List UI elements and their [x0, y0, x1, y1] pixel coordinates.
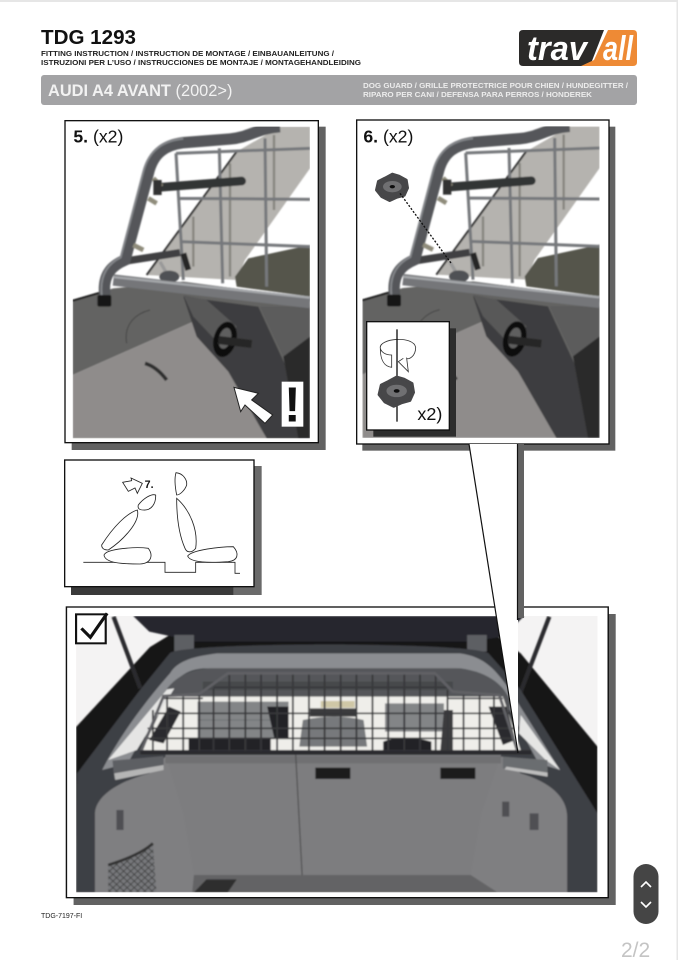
title: TDG 1293 — [41, 26, 136, 49]
fitting instruction text: ISTRUZIONI PER L’USO / INSTRUCCIONES DE MONTAJE / MONTAGEHANDLEIDING — [41, 58, 361, 67]
step 6 label: 6. (x2) — [363, 126, 413, 146]
product description: DOG GUARD / GRILLE PROTECTRICE POUR CHIEN / HUNDEGITTER / — [363, 81, 628, 90]
panel: final installed view — [66, 607, 616, 905]
inset: knob rotation — [367, 322, 456, 437]
logo: travall: trav — [527, 30, 589, 68]
arrow — [234, 387, 273, 423]
step 5 label: 5. (x2) — [73, 126, 123, 146]
scroll control — [634, 864, 658, 924]
product description: RIPARO PER CANI / DEFENSA PARA PERROS / HONDEREK — [363, 90, 593, 99]
callout connector wedge — [469, 444, 524, 753]
product description — [363, 81, 628, 99]
checkbox — [76, 613, 107, 643]
logo: travall — [519, 30, 637, 68]
step 7 label: 7. — [145, 479, 154, 491]
fitting instruction text — [41, 49, 361, 67]
header bar — [41, 75, 637, 105]
panel: step 7 seats — [65, 460, 262, 595]
footer code: TDG-7197-FI — [41, 913, 82, 920]
warning mark: ! — [284, 378, 301, 433]
inset multiplier: x2) — [417, 404, 442, 424]
fitting instruction text: FITTING INSTRUCTION / INSTRUCTION DE MONTAGE / EINBAUANLEITUNG / — [41, 49, 334, 58]
panel: step 5 — [65, 121, 326, 450]
panel: step 6 — [357, 120, 615, 451]
icon: fold arrow — [123, 478, 142, 493]
seat diagram — [83, 473, 240, 573]
logo: travall: all — [603, 30, 634, 68]
vehicle name: AUDI A4 AVANT (2002>) — [48, 82, 232, 100]
icon: knob with dashed line — [376, 174, 452, 264]
